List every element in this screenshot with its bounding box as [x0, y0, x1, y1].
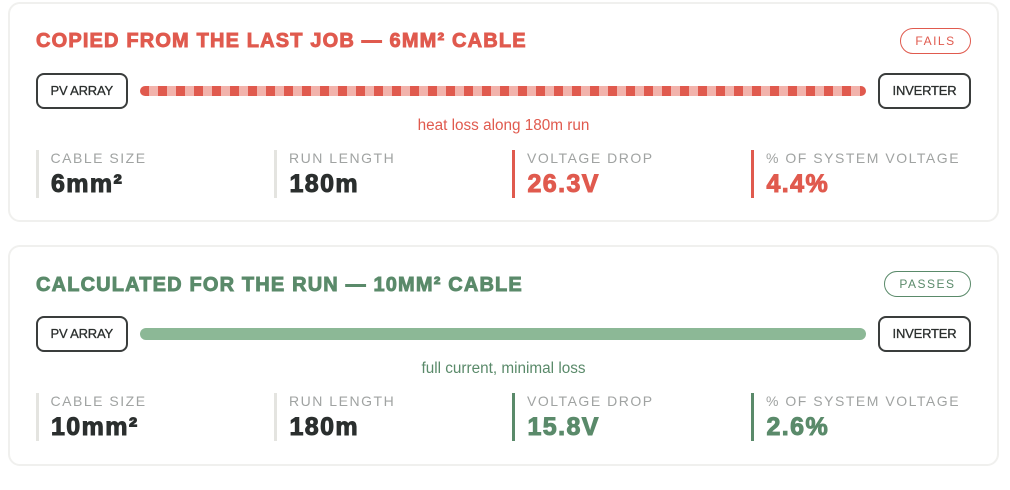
cable: dashed heat loss line [140, 86, 866, 96]
stat: percent of system voltage [751, 150, 971, 198]
stat: percent of system voltage: % OF SYSTEM VOLTAGE [766, 393, 960, 409]
panel: 10mm cable passes [8, 245, 999, 466]
stat: voltage drop [512, 150, 732, 198]
stat: voltage drop: 26.3V [528, 170, 600, 198]
stat: cable size: 10mm² [51, 413, 139, 441]
node: PV array: PV ARRAY [51, 83, 113, 98]
stat: cable size: 6mm² [51, 170, 123, 198]
panel: 6mm cable fails [8, 2, 999, 222]
stat: voltage drop [512, 393, 732, 441]
badge: fails [900, 28, 971, 54]
stat: voltage drop: VOLTAGE DROP [527, 150, 654, 166]
badge: passes: PASSES [899, 277, 956, 291]
stat: cable size [36, 393, 256, 441]
stat: run length: RUN LENGTH [289, 150, 395, 166]
node: inverter: INVERTER [893, 326, 956, 341]
stat: run length: 180m [290, 170, 359, 198]
badge: passes [884, 271, 971, 297]
stat: percent of system voltage [751, 393, 971, 441]
stat: run length: RUN LENGTH [289, 393, 395, 409]
node: inverter: INVERTER [893, 83, 956, 98]
stat: cable size [36, 150, 256, 198]
node: PV array: PV ARRAY [51, 326, 113, 341]
stat: voltage drop: 15.8V [528, 413, 600, 441]
stat: voltage drop: VOLTAGE DROP [527, 393, 654, 409]
cable note: heat loss along 180m run [418, 116, 589, 134]
stat: cable size: CABLE SIZE [50, 150, 147, 166]
node: PV array [36, 316, 128, 352]
stat: run length [274, 150, 494, 198]
node: inverter [878, 73, 971, 109]
stat: run length: 180m [290, 413, 359, 441]
node: PV array [36, 73, 128, 109]
stat: cable size: CABLE SIZE [50, 393, 147, 409]
stat: percent of system voltage: 4.4% [766, 170, 829, 198]
stat: percent of system voltage: 2.6% [766, 413, 829, 441]
node: inverter [878, 316, 971, 352]
stat: run length [274, 393, 494, 441]
heading: copied from the last job: COPIED FROM THE LAST JOB — 6MM² CABLE [36, 30, 527, 52]
badge: fails: FAILS [915, 34, 956, 48]
heading: calculated for the run: CALCULATED FOR THE RUN — 10MM² CABLE [36, 274, 523, 296]
stat: percent of system voltage: % OF SYSTEM VOLTAGE [766, 150, 960, 166]
cable: solid full current line [140, 328, 866, 340]
cable note: full current, minimal loss [421, 360, 586, 376]
